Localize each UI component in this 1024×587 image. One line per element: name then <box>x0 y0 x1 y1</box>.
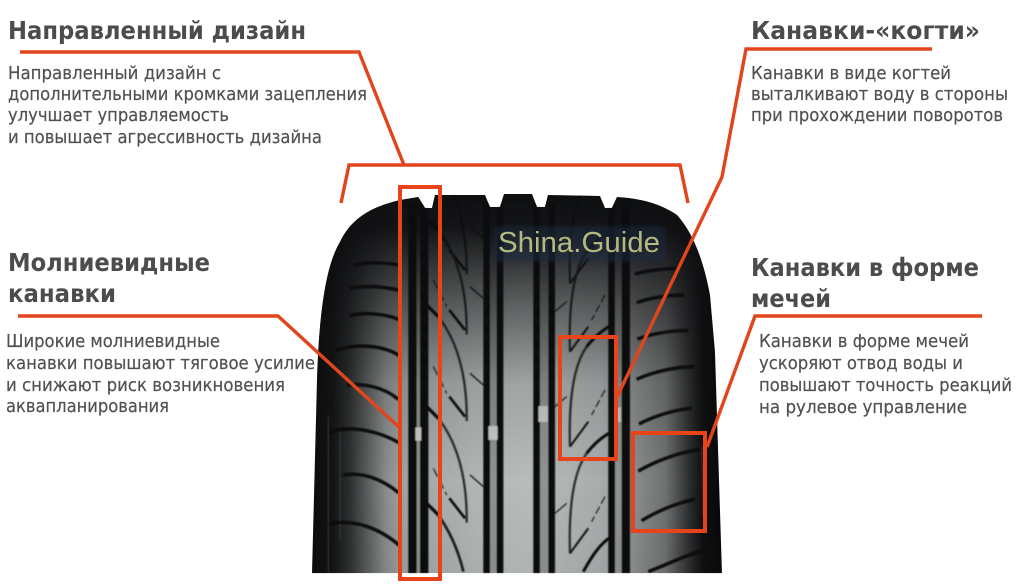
heading <box>751 253 979 313</box>
top shadow <box>310 190 730 573</box>
groove walls <box>417 203 622 573</box>
grooves <box>408 203 630 573</box>
description <box>751 64 1008 126</box>
description: выталкивают воду в стороны <box>751 85 1008 105</box>
description: ускоряют отвод воды и <box>759 354 963 374</box>
leader line: lightning grooves <box>18 316 400 428</box>
right shoulder sipes <box>635 268 707 572</box>
description: аквапланирования <box>6 397 169 417</box>
description: канавки повышают тяговое усилие <box>6 354 315 374</box>
description: повышают точность реакций <box>759 376 1012 396</box>
heading block: claw grooves <box>751 16 1008 126</box>
shoulder ribs <box>328 417 703 573</box>
highlight box: sword groove <box>633 433 705 531</box>
description: улучшает управляемость <box>8 106 229 126</box>
heading: Канавки-«когти» <box>751 16 980 45</box>
heading <box>8 248 210 308</box>
leader line: direct design with bracket <box>20 52 688 203</box>
heading block: sword grooves <box>751 253 1012 418</box>
description: Направленный дизайн с <box>8 64 221 84</box>
heading: Молниевидные <box>8 248 210 277</box>
highlight box: lightning groove <box>400 187 440 579</box>
description <box>8 64 367 148</box>
heading: Канавки в форме <box>751 253 979 282</box>
inner rib crescents <box>428 194 610 573</box>
watermark: Shina.Guide: Shina.Guide <box>498 227 660 259</box>
heading: канавки <box>8 279 116 308</box>
heading: Направленный дизайн <box>8 16 306 45</box>
heading: мечей <box>751 284 831 313</box>
description: Канавки в виде когтей <box>751 64 951 84</box>
description <box>759 332 1012 418</box>
description: дополнительными кромками зацепления <box>8 85 367 105</box>
wear indicators <box>415 406 621 441</box>
description <box>6 332 315 417</box>
description: и повышает агрессивность дизайна <box>8 128 322 148</box>
description: Широкие молниевидные <box>6 332 220 352</box>
description: при прохождении поворотов <box>751 106 1003 126</box>
heading block: lightning grooves <box>6 248 315 417</box>
description: и снижают риск возникновения <box>6 376 285 396</box>
highlight box: claw groove <box>560 337 616 459</box>
description: Канавки в форме мечей <box>759 332 969 352</box>
leader line: sword grooves <box>707 316 982 447</box>
left shoulder sipes <box>328 263 400 546</box>
description: на рулевое управление <box>759 398 967 418</box>
leader line: claw grooves <box>617 49 932 397</box>
tire photo <box>312 194 722 574</box>
heading block: direct design <box>8 16 367 148</box>
